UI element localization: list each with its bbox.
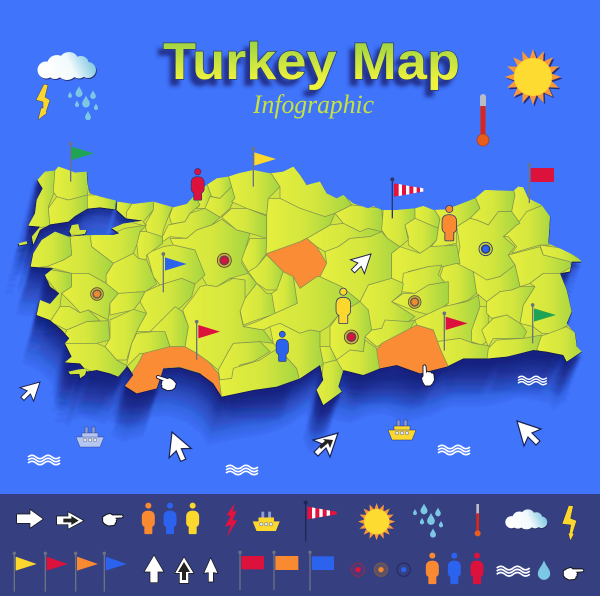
ship: yellow (388, 420, 416, 440)
cloud (505, 509, 548, 530)
person: orange (442, 205, 457, 241)
icon: sun (505, 49, 562, 106)
person orange (426, 553, 439, 584)
flag rectangle red (238, 551, 264, 590)
icon panel (0, 494, 600, 596)
panel icons left (13, 503, 298, 592)
water drop (538, 560, 550, 580)
rain drops (413, 503, 443, 538)
icon: rain drops (68, 86, 98, 120)
waves (497, 566, 530, 576)
arrow right (17, 509, 43, 528)
person blue (163, 503, 176, 534)
person yellow (186, 503, 199, 534)
map provinces (18, 163, 585, 408)
arrow: outlined (313, 433, 338, 457)
arrow: white (163, 432, 194, 464)
person red (470, 553, 483, 584)
arrow up (144, 555, 164, 583)
subtitle: Infographic (252, 90, 374, 119)
panel icons right (304, 501, 584, 591)
flag orange (74, 552, 98, 592)
ship yellow (253, 512, 280, 531)
arrow: white right (517, 421, 541, 446)
icon: cloud (38, 52, 97, 81)
western provinces (25, 163, 360, 400)
map markers west (69, 142, 276, 360)
thermometer (475, 504, 481, 536)
eastern provinces (307, 185, 585, 408)
bullseye red (217, 253, 231, 267)
flag: red (442, 311, 468, 351)
bullseye red (351, 563, 365, 576)
flag red (44, 552, 68, 592)
map shadow (4, 172, 580, 453)
arrow up outlined (175, 557, 194, 583)
orange province: Antalya (122, 347, 222, 398)
arrow: lower left (20, 382, 40, 401)
arrow on map (350, 254, 371, 274)
hand right (103, 513, 123, 526)
flag: blue (161, 252, 187, 292)
bullseye orange (91, 288, 103, 300)
windsock (390, 177, 423, 218)
arrow right outlined (57, 512, 84, 529)
flag yellow (13, 552, 37, 592)
arrow up small (204, 558, 218, 582)
hand on Antalya (153, 374, 177, 393)
waves (518, 376, 547, 385)
person: blue (276, 331, 288, 361)
bullseye orange (408, 296, 421, 308)
icon: lightning (36, 84, 50, 120)
map outline (18, 167, 582, 406)
icon: thermometer (477, 94, 489, 146)
bullseye orange (374, 563, 388, 576)
person blue (448, 553, 461, 584)
windsock (304, 501, 337, 542)
flag: yellow (251, 147, 276, 187)
hand on Gaziantep (422, 365, 434, 386)
person orange (142, 503, 155, 534)
orange province: central (266, 238, 327, 288)
lightning red (225, 503, 237, 537)
waves (28, 455, 60, 465)
bullseye red (344, 330, 358, 344)
person: red (191, 168, 204, 200)
waves (438, 445, 470, 455)
ship: light blue (76, 427, 104, 447)
sun (358, 503, 396, 541)
flag rectangle blue (308, 551, 334, 591)
flag: red rectangle (527, 163, 554, 203)
map markers east (344, 163, 556, 351)
flag blue (103, 552, 127, 592)
orange province: south-east (377, 325, 448, 377)
flag: red (195, 320, 220, 360)
flag: green (531, 303, 556, 343)
waves (226, 465, 258, 475)
flag: green (69, 142, 94, 182)
hand right (563, 567, 584, 580)
bullseye blue (479, 242, 492, 256)
person: yellow (336, 288, 351, 324)
lightning yellow (562, 505, 577, 541)
title: Turkey Map (163, 33, 460, 91)
bullseye blue (397, 563, 410, 576)
flag rectangle orange (272, 551, 298, 590)
